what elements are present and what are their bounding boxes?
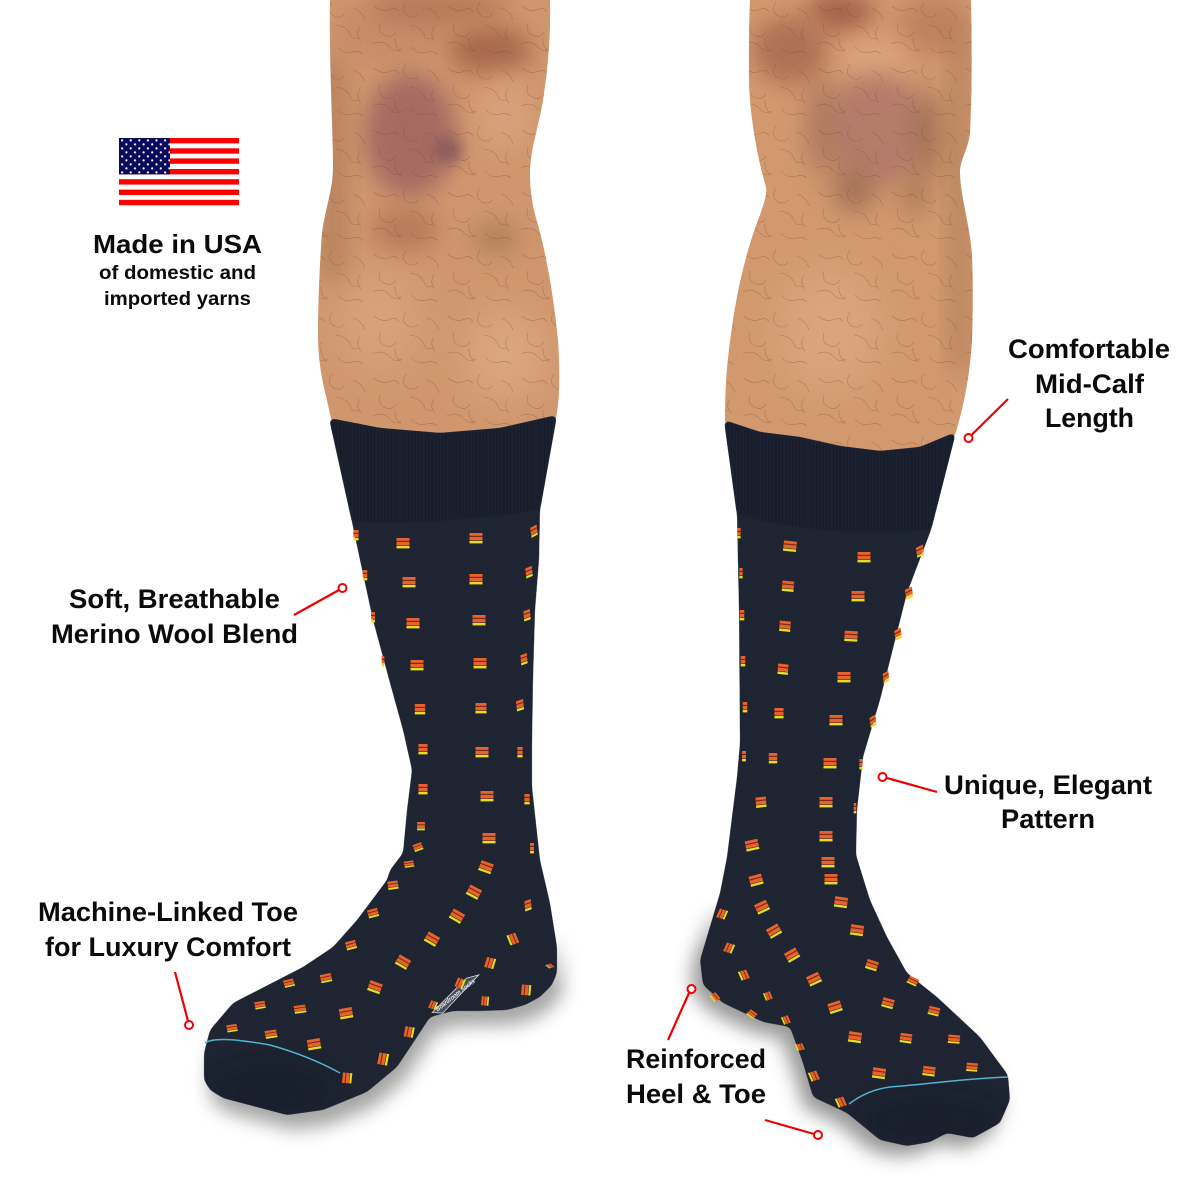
callout: elegant pattern <box>878 770 1152 834</box>
callout: reinforced heel and toe: Heel & Toe <box>626 1079 766 1109</box>
left sock dot pattern <box>226 524 555 1084</box>
left leg skin <box>318 0 560 433</box>
callout: reinforced heel and toe: Reinforced <box>626 1044 766 1074</box>
callout: merino wool blend: Soft, Breathable <box>69 584 280 614</box>
left sock <box>200 410 570 1120</box>
left sock cuff <box>329 415 557 523</box>
callout: machine-linked toe <box>38 897 298 1029</box>
callout: mid-calf length: Length <box>1045 403 1134 433</box>
callout: merino wool blend <box>51 584 346 649</box>
text: Made in USA <box>93 229 262 310</box>
text: Made in USA: Made in USA <box>93 229 262 259</box>
right sock <box>690 410 1020 1150</box>
callout: mid-calf length <box>964 334 1170 442</box>
callout: reinforced heel and toe <box>626 985 822 1139</box>
callout: mid-calf length: Mid-Calf <box>1035 369 1145 399</box>
text: Made in USA: imported yarns <box>104 289 251 310</box>
left sock logo: Boardroom Socks <box>435 978 477 1013</box>
left sock toe seam <box>205 1039 340 1073</box>
left foot shadow <box>198 938 574 1141</box>
callout: elegant pattern: Pattern <box>1001 804 1095 834</box>
callout: machine-linked toe: for Luxury Comfort <box>45 932 291 962</box>
callout: merino wool blend: Merino Wool Blend <box>51 619 298 649</box>
right sock cuff <box>724 420 956 533</box>
icon: American flag <box>119 138 239 205</box>
right sock dot pattern <box>709 528 978 1108</box>
callout: machine-linked toe: Machine-Linked Toe <box>38 897 298 927</box>
right foot shadow <box>680 906 1012 1168</box>
right sock toe seam <box>849 1077 1008 1104</box>
right leg skin <box>725 0 973 451</box>
callout: elegant pattern: Unique, Elegant <box>944 770 1152 800</box>
callout: mid-calf length: Comfortable <box>1008 334 1170 364</box>
text: Made in USA: of domestic and <box>99 263 256 284</box>
